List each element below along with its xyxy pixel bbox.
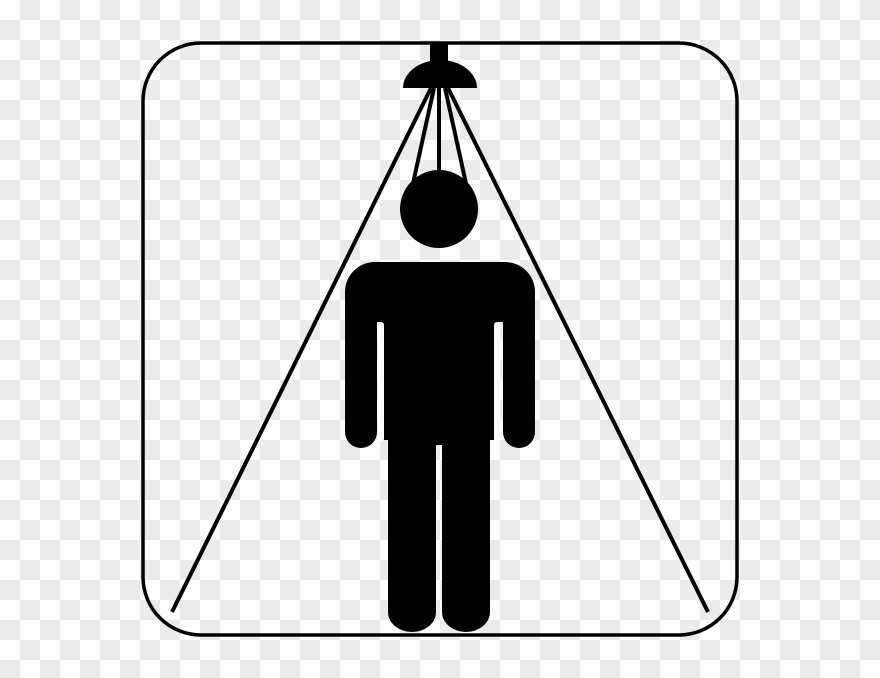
water spray lines: [172, 88, 708, 612]
person: [345, 170, 535, 632]
shower head: [403, 42, 477, 88]
rounded frame: [143, 43, 737, 635]
gaps: [378, 322, 500, 442]
